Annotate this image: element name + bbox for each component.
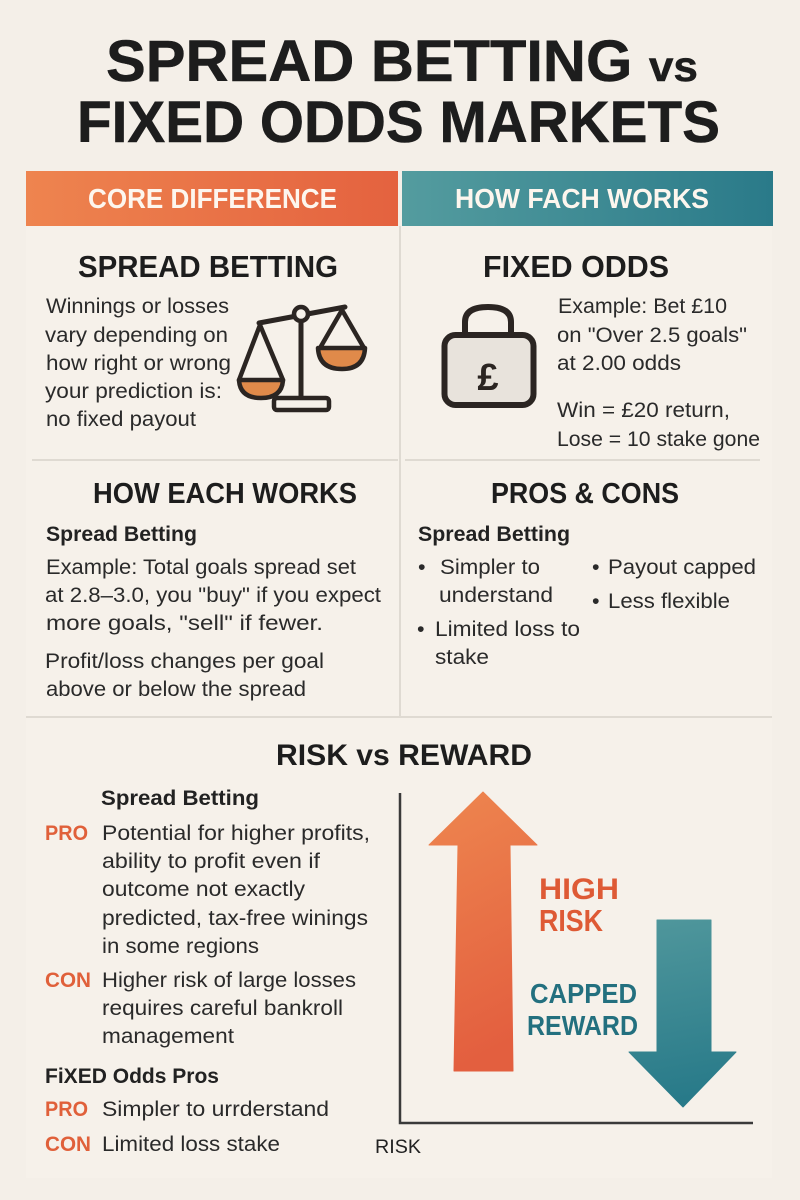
heading: risk vs reward: RISK vs REWARD (276, 739, 532, 772)
list: cons (592, 555, 756, 613)
icon: padlock with pound sign (444, 307, 534, 405)
text: spread con: management (102, 1024, 234, 1048)
list: cons: Less flexible (608, 589, 730, 613)
text: spread betting example (45, 555, 381, 701)
text: spread pro: predicted, tax-free winings (102, 906, 368, 930)
subheading: spread betting: Spread Betting (46, 522, 197, 546)
label: con: CON (45, 1132, 91, 1156)
list: pros: Limited loss to (435, 617, 580, 641)
list: cons: Payout capped (608, 555, 756, 579)
text: spread betting example: at 2.8–3.0, you "buy" if you expect (45, 583, 381, 607)
label: con: CON (45, 968, 91, 992)
icon: padlock with pound sign: £ (477, 357, 499, 399)
text: spread pro (102, 821, 370, 958)
text: spread pro: in some regions (102, 934, 259, 958)
panel: content background (26, 226, 772, 1178)
icon: balance scale (238, 307, 365, 410)
label: pro: PRO (45, 821, 88, 845)
text: spread con (102, 968, 356, 1048)
header: core difference (26, 171, 398, 226)
label: risk axis: RISK (375, 1137, 421, 1158)
text: spread betting example: above or below the spread (46, 677, 306, 701)
chart: risk vs reward axes (400, 793, 753, 1123)
text: spread betting description (45, 294, 231, 431)
label: high risk: RISK (539, 903, 604, 938)
header: core difference: CORE DIFFERENCE (88, 183, 337, 214)
label: capped reward: CAPPED (530, 978, 637, 1009)
text: spread pro: outcome not exactly (102, 877, 305, 901)
title (77, 29, 720, 155)
text: spread betting description: how right or wrong (46, 351, 231, 375)
subheading: spread betting: Spread Betting (418, 522, 570, 546)
panel: fixed odds (444, 249, 760, 451)
header: how each works: HOW FACH WORKS (455, 183, 709, 214)
list: pros: stake (435, 645, 489, 669)
list: cons: • (592, 555, 600, 579)
panel: spread betting (45, 249, 365, 431)
text: spread betting example: Profit/loss changes per goal (45, 649, 324, 673)
text: spread betting example: more goals, "sell" if fewer. (46, 611, 323, 635)
subheading: fixed odds pros: FiXED Odds Pros (45, 1064, 219, 1088)
label: capped reward (527, 978, 638, 1041)
text: fixed odds example (557, 294, 760, 451)
text: fixed pro: Simpler to urrderstand (102, 1097, 329, 1121)
text: spread betting description: Winnings or losses (46, 294, 229, 318)
label: capped reward: REWARD (527, 1010, 638, 1041)
text: spread pro: Potential for higher profits, (102, 821, 370, 845)
arrow: high risk up (429, 792, 537, 1071)
text: fixed odds example: at 2.00 odds (557, 351, 681, 375)
heading: fixed odds: FIXED ODDS (483, 249, 669, 284)
text: spread betting description: your prediction is: (45, 379, 222, 403)
text: fixed odds example: Win = £20 return, (557, 398, 730, 422)
heading: how each works: HOW EACH WORKS (93, 478, 357, 510)
text: fixed con: Limited loss stake (102, 1132, 280, 1156)
text: spread con: Higher risk of large losses (102, 968, 356, 992)
subheading: spread betting: Spread Betting (101, 786, 259, 810)
label: high risk (539, 873, 619, 938)
list: pros: • (418, 555, 426, 579)
header: how each works (402, 171, 773, 226)
arrow: capped reward down (629, 920, 736, 1107)
text: spread betting description: no fixed payout (46, 407, 196, 431)
text: fixed odds example: Example: Bet £10 (558, 294, 727, 318)
title: FIXED ODDS MARKETS (77, 90, 720, 155)
list: pros: • (417, 617, 425, 641)
panel: how each works (45, 478, 381, 701)
text: spread betting example: Example: Total goals spread set (46, 555, 356, 579)
list: pros: Simpler to (440, 555, 540, 579)
text: spread betting description: vary depending on (45, 323, 228, 347)
title: SPREAD BETTING vs (106, 29, 698, 94)
list: pros (417, 555, 580, 669)
text: fixed odds example: Lose = 10 stake gone (557, 427, 760, 451)
label: high risk: HIGH (539, 873, 619, 906)
list: pros: understand (439, 583, 553, 607)
panel: risk vs reward (45, 739, 753, 1158)
label: pro: PRO (45, 1097, 88, 1121)
text: spread con: requires careful bankroll (102, 996, 343, 1020)
text: spread pro: ability to profit even if (102, 849, 320, 873)
heading: spread betting: SPREAD BETTING (78, 249, 338, 284)
text: fixed odds example: on "Over 2.5 goals" (557, 323, 747, 347)
panel: pros and cons (417, 478, 756, 669)
heading: pros and cons: PROS & CONS (491, 478, 679, 510)
list: cons: • (592, 589, 600, 613)
